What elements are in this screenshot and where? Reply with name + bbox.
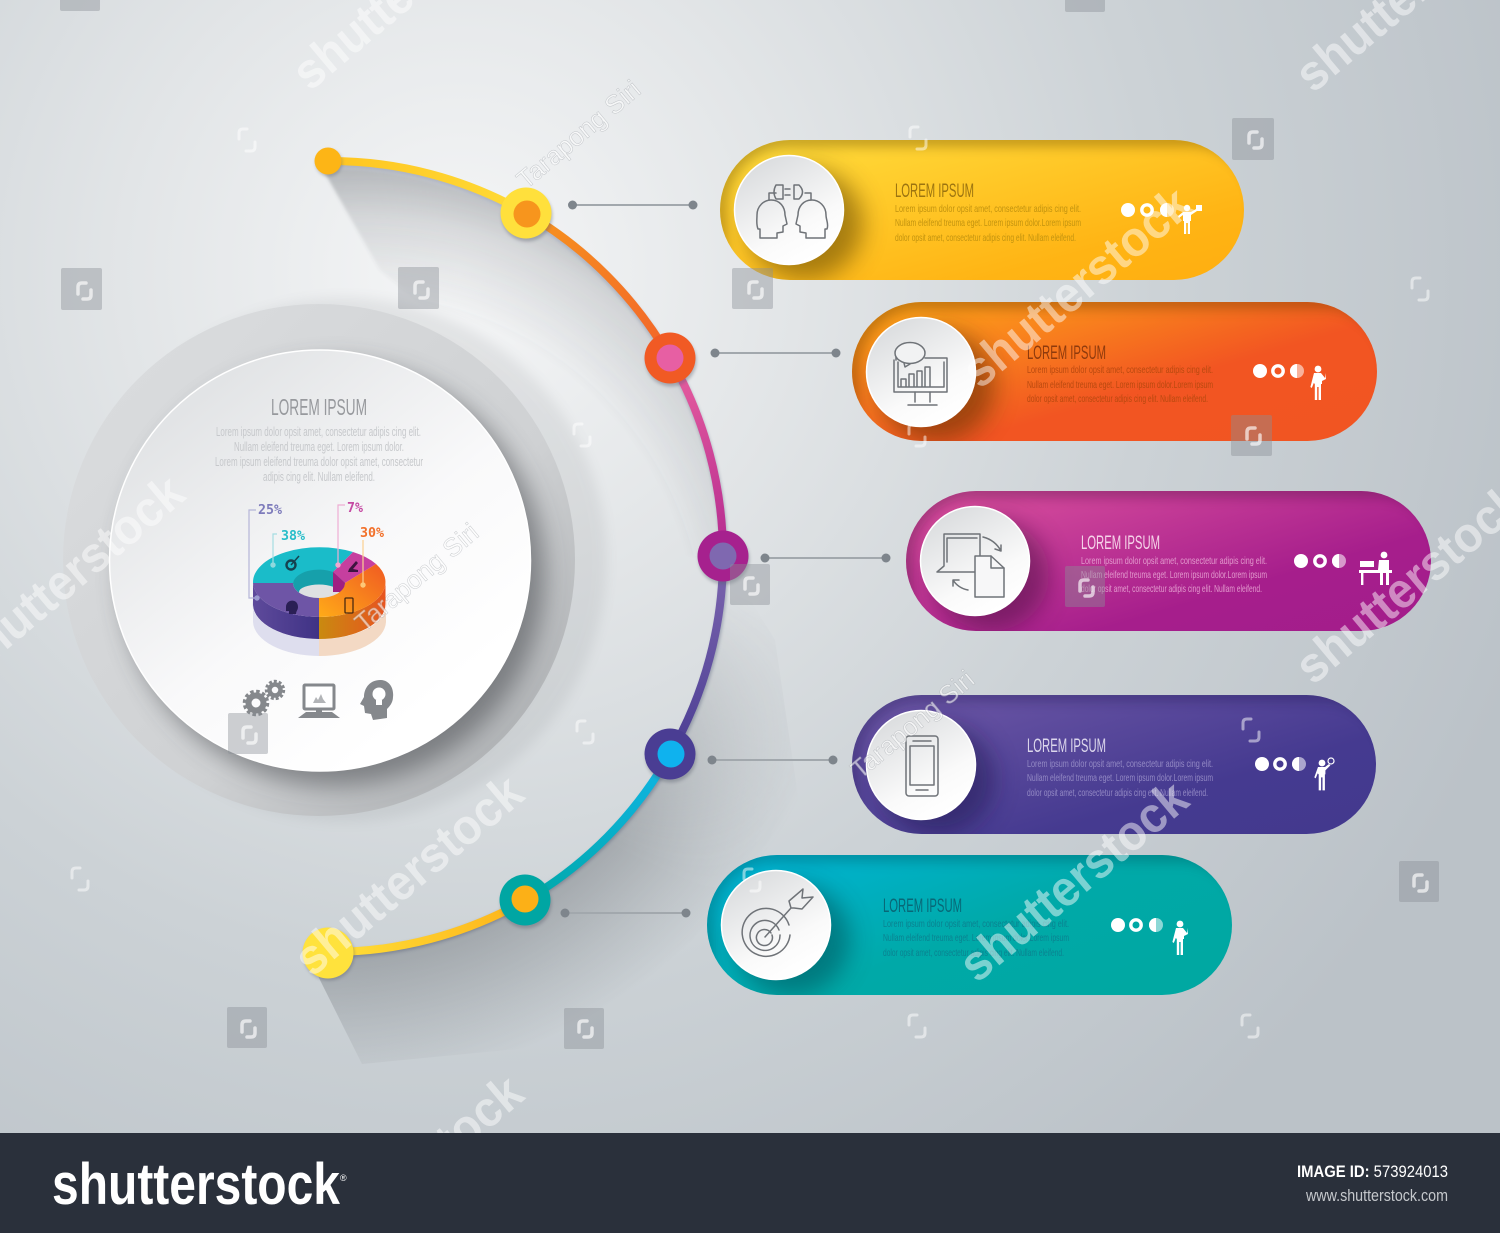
card 5 body — [883, 918, 1069, 959]
node 3 — [698, 530, 750, 584]
icon: person at desk — [1359, 552, 1392, 585]
footer bar — [0, 1133, 1500, 1233]
card 4 body: dolor opsit amet, consectetur adipis cing elit. Nullam eleifend. — [1027, 787, 1208, 799]
footer logo: shutterstock — [52, 1152, 341, 1217]
card 4 body: Nullam eleifend treuma eget. Lorem ipsum dolor.Lorem ipsum — [1027, 772, 1213, 784]
card body — [852, 302, 1377, 441]
percent labels: 7% — [347, 500, 364, 516]
white disc — [110, 350, 530, 771]
node end — [302, 928, 354, 980]
percent labels: 30% — [360, 525, 385, 541]
segment 7% — [333, 552, 376, 583]
connector 1 — [568, 200, 698, 210]
watermark: shutterstock text: shutterstock — [948, 769, 1199, 992]
disc body text: adipis cing elit. Nullam eleifend. — [263, 470, 375, 484]
watermark: shutterstock text: shutterstock — [951, 175, 1202, 398]
segment orange — [526, 213, 670, 358]
panel: card 1 yellow — [720, 140, 1244, 280]
registered mark: ® — [340, 1173, 347, 1183]
percent labels — [258, 500, 385, 544]
card body — [707, 855, 1232, 995]
donut mini icons — [286, 556, 358, 614]
card 3 body: Nullam eleifend treuma eget. Lorem ipsum dolor.Lorem ipsum — [1081, 569, 1267, 581]
arc long shadow: upper — [322, 168, 723, 556]
segment yellow bottom — [328, 900, 526, 952]
segment blue — [526, 754, 670, 900]
card 3 heading: LOREM IPSUM — [1081, 532, 1160, 554]
card 2 body: Nullam eleifend treuma eget. Lorem ipsum dolor.Lorem ipsum — [1027, 379, 1213, 391]
icon: computer — [298, 685, 340, 718]
rating dots — [1111, 918, 1163, 932]
panel: central circle — [63, 298, 607, 822]
icon button — [920, 506, 1030, 616]
card 1 body: Lorem ipsum dolor opsit amet, consectetur adipis cing elit. — [895, 203, 1081, 215]
watermark stamps — [60, 0, 1439, 1049]
rating dots — [1255, 757, 1306, 771]
disc shadow — [121, 362, 545, 786]
panel: card 4 purple — [852, 695, 1376, 834]
donut reflection — [253, 600, 386, 656]
card inner shade — [906, 491, 1410, 631]
icon: person — [1178, 205, 1202, 234]
image id: IMAGE ID: 573924013 — [1297, 1162, 1448, 1181]
connector 3 — [760, 554, 890, 562]
icon: laptop and document — [937, 534, 1004, 597]
icon: phone — [906, 736, 938, 796]
icon: person with magnifier — [1314, 758, 1334, 790]
card 3 body — [1081, 555, 1267, 595]
card 3 body: Lorem ipsum dolor opsit amet, consectetur adipis cing elit. — [1081, 555, 1267, 567]
icon: monitor with chart — [894, 342, 947, 405]
card inner shade — [720, 140, 1228, 280]
watermark: author name: Tarapong Siri — [349, 517, 484, 638]
donut hole — [293, 568, 345, 600]
disc body text: Lorem ipsum dolor opsit amet, consectetur adipis cing elit. — [216, 425, 421, 439]
node 4 — [644, 728, 696, 782]
connector 5 — [560, 908, 690, 918]
card body — [720, 140, 1244, 280]
icon button — [722, 870, 830, 980]
icon button — [866, 318, 976, 426]
card 2 heading: LOREM IPSUM — [1027, 342, 1106, 364]
faint outer halo — [83, 298, 607, 822]
inner wall of pink — [333, 572, 345, 592]
rating dots — [1294, 554, 1346, 568]
card 2 body: dolor opsit amet, consectetur adipis cing elit. Nullam eleifend. — [1027, 393, 1208, 405]
card 5 body: dolor opsit amet, consectetur adipis cing elit. Nullam eleifend. — [883, 947, 1064, 959]
icon button — [866, 710, 976, 820]
leader dots — [254, 562, 366, 601]
node 5 — [500, 874, 552, 928]
segment pink — [670, 358, 723, 556]
segment 38% — [253, 547, 353, 583]
watermark: author name: Tarapong Siri — [511, 74, 646, 195]
card body — [852, 695, 1376, 834]
panel: card 3 magenta — [906, 491, 1431, 631]
icon: gears — [244, 681, 284, 714]
percent labels: 25% — [258, 502, 283, 518]
card body — [906, 491, 1431, 631]
website: www.shutterstock.com — [1305, 1187, 1448, 1205]
arc long shadow: lower — [318, 636, 769, 1062]
panel: card 2 orange — [852, 302, 1377, 441]
node start — [314, 148, 342, 176]
disc body text: Lorem ipsum eleifend treuma dolor opsit amet, consectetur — [215, 455, 423, 469]
panel: card 5 teal — [707, 855, 1232, 995]
rating dots — [1253, 364, 1304, 378]
disc body text — [215, 425, 423, 484]
watermark: author name — [349, 74, 980, 785]
arc shadow — [329, 164, 724, 954]
icon: person on phone — [1172, 921, 1188, 955]
card 3 body: dolor opsit amet, consectetur adipis cing elit. Nullam eleifend. — [1081, 583, 1262, 595]
disc heading: LOREM IPSUM — [271, 394, 367, 420]
icon: head with bulb — [360, 680, 393, 720]
connector 2 — [710, 348, 840, 358]
card 2 body — [1027, 364, 1213, 405]
card inner shade — [852, 695, 1350, 834]
card 4 body: Lorem ipsum dolor opsit amet, consectetur adipis cing elit. — [1027, 758, 1213, 770]
outer grey ring — [63, 304, 575, 816]
icon button — [734, 156, 844, 264]
chart: 3D donut — [249, 500, 386, 656]
watermark: shutterstock text: shutterstock — [283, 763, 534, 986]
card 4 heading: LOREM IPSUM — [1027, 735, 1106, 757]
card 4 body — [1027, 758, 1213, 799]
icon: heads with plug — [757, 185, 828, 238]
segment 30% — [319, 564, 385, 617]
card 2 body: Lorem ipsum dolor opsit amet, consectetur adipis cing elit. — [1027, 364, 1213, 376]
watermark: author name: Tarapong Siri — [845, 664, 980, 785]
percent labels: 38% — [281, 528, 306, 544]
card 1 body — [895, 203, 1081, 244]
icon: person — [1310, 366, 1326, 400]
rating dots — [1121, 203, 1174, 217]
card 5 body: Lorem ipsum dolor opsit amet, consectetur adipis cing elit. — [883, 918, 1069, 930]
donut side walls — [253, 582, 386, 639]
card 5 heading: LOREM IPSUM — [883, 895, 962, 917]
connector 4 — [708, 756, 838, 764]
leader lines — [249, 505, 363, 598]
node 2 — [644, 332, 696, 386]
card inner shade — [707, 855, 1209, 995]
card 1 heading: LOREM IPSUM — [895, 180, 974, 202]
segment 25% — [253, 583, 319, 617]
segment yellow top — [328, 161, 526, 213]
icon: target with arrow — [742, 889, 813, 956]
node 1 — [500, 188, 552, 242]
card 1 body: dolor opsit amet, consectetur adipis cing elit. Nullam eleifend. — [895, 232, 1076, 244]
card 5 body: Nullam eleifend treuma eget. Lorem ipsum dolor.Lorem ipsum — [883, 932, 1069, 944]
segment purple — [670, 556, 723, 754]
timeline arc — [328, 161, 724, 954]
card inner shade — [852, 302, 1362, 441]
disc body text: Nullam eleifend treuma eget. Lorem ipsum dolor. — [234, 440, 404, 454]
card 1 body: Nullam eleifend treuma eget. Lorem ipsum dolor.Lorem ipsum — [895, 217, 1081, 229]
